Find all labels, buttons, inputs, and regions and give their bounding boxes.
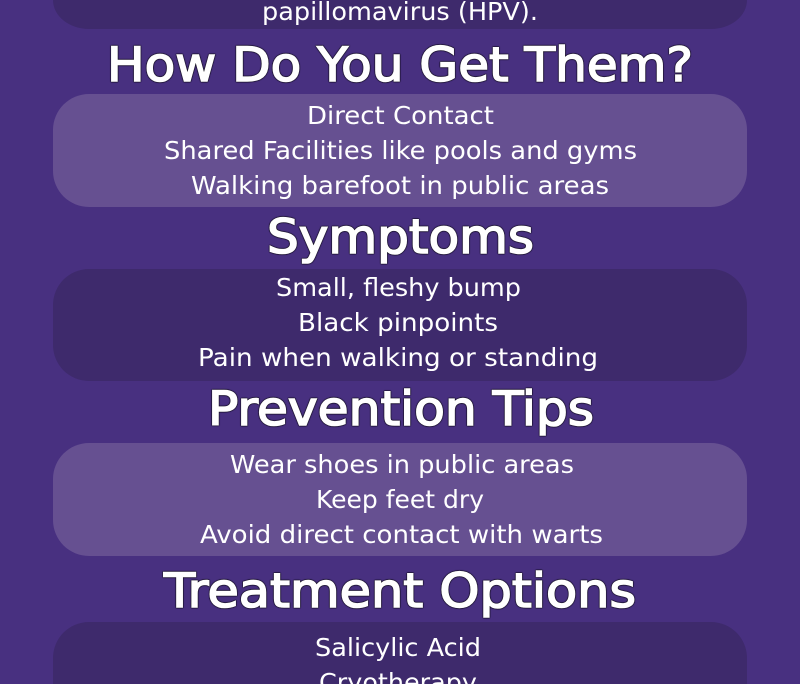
panel: symptoms [53,269,747,381]
panel: how do you get them: Direct Contact [307,101,494,130]
panel: prevention tips: Wear shoes in public areas [230,450,574,479]
panel: how do you get them [53,94,747,207]
panel: symptoms: Black pinpoints [298,308,498,337]
heading: How Do You Get Them?: How Do You Get Them? [107,38,693,93]
panel: treatment options (cropped): Salicylic Acid [315,633,481,662]
panel: how do you get them: Shared Facilities like pools and gyms [164,136,637,165]
panel: symptoms: Pain when walking or standing [198,343,598,372]
panel: prevention tips: Keep feet dry [316,485,484,514]
heading: Treatment Options: Treatment Options [163,564,636,619]
heading: Symptoms: Symptoms [267,210,534,265]
panel: symptoms: Small, fleshy bump [276,273,521,302]
panel: what causes them (cropped) [53,0,747,29]
panel: how do you get them: Walking barefoot in public areas [191,171,609,200]
panel: prevention tips [53,443,747,556]
heading: Prevention Tips: Prevention Tips [208,382,594,437]
panel: treatment options (cropped) [53,622,747,684]
panel: prevention tips: Avoid direct contact with warts [200,520,603,549]
